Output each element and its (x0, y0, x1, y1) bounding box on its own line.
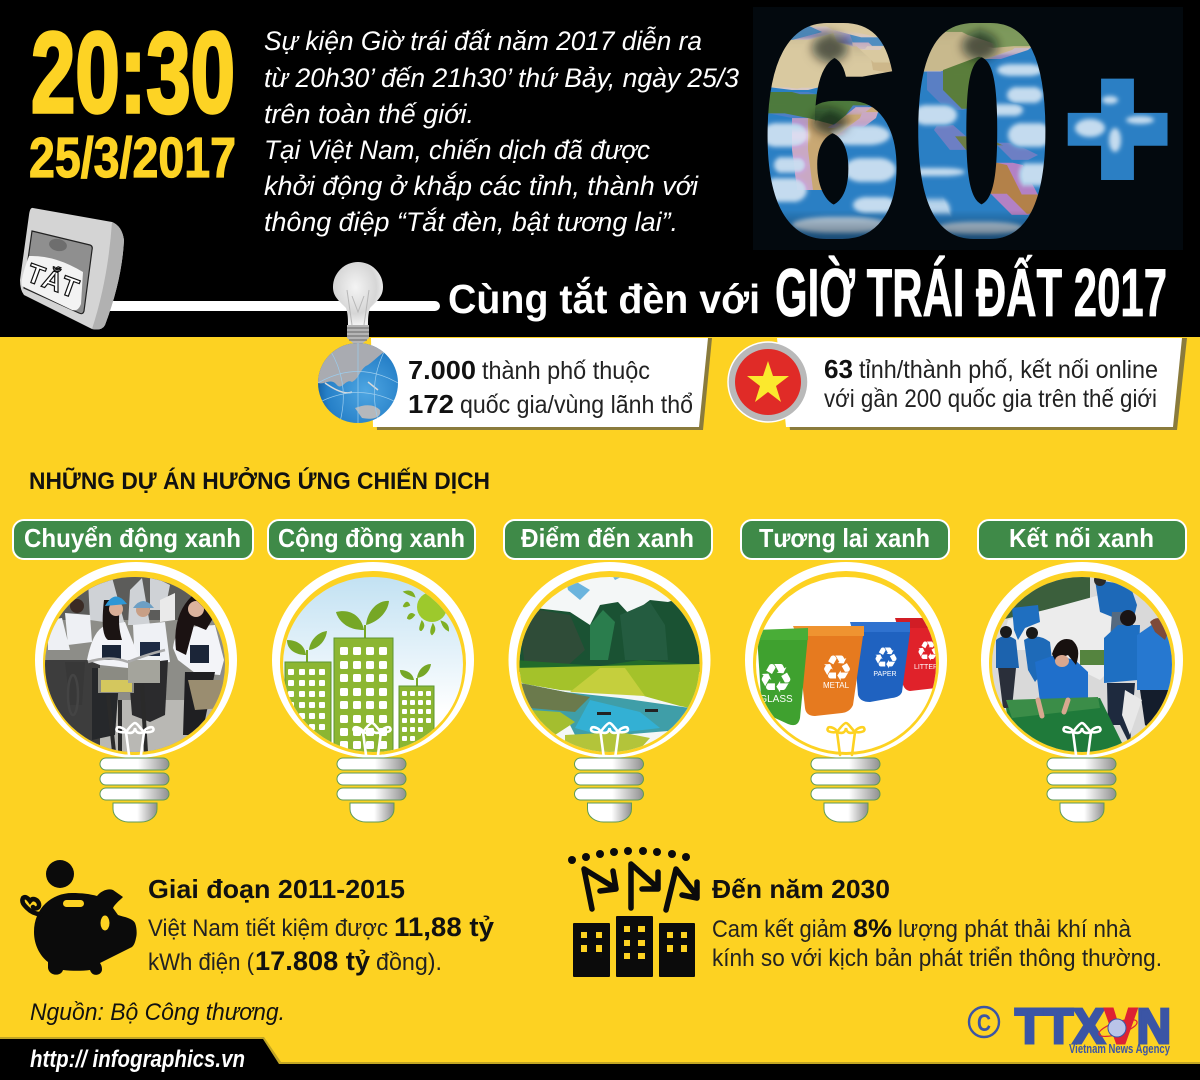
icon: piggy bank (22, 860, 137, 975)
logo: TTXVN: TTXVN (1015, 1000, 1171, 1054)
pill: Tương lai xanh (741, 520, 949, 559)
bulb 4: recycling bins photo: METAL (823, 681, 850, 690)
section heading: NHỮNG DỰ ÁN HƯỞNG ỨNG CHIẾN DỊCH (29, 466, 490, 495)
text block: 2011-2015 savings: Giai đoạn 2011-2015 (148, 874, 405, 904)
text block: 2011-2015 savings (148, 874, 494, 976)
intro paragraph: thông điệp “Tắt đèn, bật tương lai”. (264, 206, 678, 237)
text block: 2030 commitment: Đến năm 2030 (712, 874, 890, 904)
bulb 5: volunteers photo (981, 562, 1183, 822)
label: TẮT: TẮT (23, 257, 83, 304)
intro paragraph: Tại Việt Nam, chiến dịch đã được (264, 135, 650, 165)
panel: 63 provinces: với gần 200 quốc gia trên thế giới (824, 385, 1157, 413)
intro paragraph: khởi động ở khắp các tỉnh, thành với (264, 170, 699, 201)
pill: Kết nối xanh: Kết nối xanh (1009, 523, 1154, 553)
panel: 7.000 cities (371, 338, 712, 430)
text block: 2030 commitment (712, 874, 1162, 972)
logo: copyright mark: C (977, 1010, 991, 1037)
icon: Vietnam flag badge (728, 342, 808, 422)
pill: Kết nối xanh (978, 520, 1186, 559)
pill: Điểm đến xanh: Điểm đến xanh (521, 523, 694, 553)
panel: 63 provinces: tỉnh/thành phố, kết nối online (859, 356, 1158, 384)
source note: Nguồn: Bộ Công thương. (30, 999, 285, 1026)
bulb 4: recycling bins photo: GLASS (759, 694, 793, 705)
date: 25/3/2017: 25/3/2017 (29, 126, 236, 190)
big time: 20:30: 20:30 (31, 10, 235, 137)
panel: 7.000 cities: quốc gia/vùng lãnh thổ (460, 391, 693, 419)
text block: 2011-2015 savings: kWh điện ( (148, 949, 254, 976)
logo: TTXVN: Vietnam News Agency (1069, 1042, 1170, 1056)
intro paragraph: từ 20h30’ đến 21h30’ thứ Bảy, ngày 25/3 (264, 63, 739, 93)
text block: 2030 commitment: lượng phát thải khí nhà (898, 916, 1132, 943)
bulb 4: recycling bins photo: ♻ (824, 654, 850, 684)
logo: copyright mark (969, 1007, 999, 1037)
intro paragraph (264, 25, 739, 237)
title: Cùng tắt đèn với: Cùng tắt đèn với (448, 276, 760, 322)
bulb 4: recycling bins photo (745, 562, 947, 822)
bulb 4: recycling bins photo: ♻ (875, 646, 897, 671)
footer bar with URL (0, 1037, 1200, 1080)
bulb 4: recycling bins photo: LITTER (914, 664, 938, 671)
text block: 2030 commitment: kính so với kịch bản phát triển thông thường. (712, 945, 1162, 972)
bulb 3: rice field landscape photo (508, 562, 710, 822)
panel: 63 provinces: 63 (824, 354, 853, 384)
bulb 2: green city illustration (272, 562, 474, 822)
pill: Tương lai xanh: Tương lai xanh (759, 523, 930, 553)
intro paragraph: Sự kiện Giờ trái đất năm 2017 diễn ra (264, 25, 702, 56)
intro paragraph: trên toàn thế giới. (264, 99, 474, 129)
wire from switch to bulb (108, 301, 435, 311)
text block: 2011-2015 savings: đồng). (376, 949, 442, 976)
icon: light bulb (333, 262, 383, 344)
icon: city with arrows (568, 847, 697, 977)
bulb 1: cyclists photo (35, 562, 237, 822)
black header band (0, 0, 1200, 337)
icon: light switch (20, 208, 124, 330)
text block: 2011-2015 savings: 11,88 tỷ (394, 912, 494, 942)
bulb 4: recycling bins photo: ♻ (761, 663, 791, 696)
text block: 2011-2015 savings: Việt Nam tiết kiệm được (148, 915, 388, 942)
panel: 7.000 cities: thành phố thuộc (482, 357, 650, 385)
panel: 7.000 cities: 7.000 (408, 355, 476, 385)
bulb 4: recycling bins photo: ♻ (918, 640, 938, 663)
pill: Điểm đến xanh (504, 520, 712, 559)
60+ earth logo (753, 0, 1183, 301)
text block: 2030 commitment: 8% (853, 915, 892, 943)
panel: 7.000 cities: 172 (408, 389, 454, 419)
icon: globe (318, 335, 398, 423)
footer bar with URL: http:// infographics.vn (30, 1046, 245, 1073)
pill: Cộng đồng xanh: Cộng đồng xanh (278, 523, 465, 553)
pill: Chuyển động xanh: Chuyển động xanh (24, 523, 241, 553)
text block: 2011-2015 savings: 17.808 tỷ (255, 946, 370, 976)
bulb 4: recycling bins photo: PAPER (873, 671, 897, 678)
60+ earth logo: + (1068, 32, 1168, 224)
panel: 63 provinces (777, 338, 1187, 430)
text block: 2030 commitment: Cam kết giảm (712, 916, 847, 943)
